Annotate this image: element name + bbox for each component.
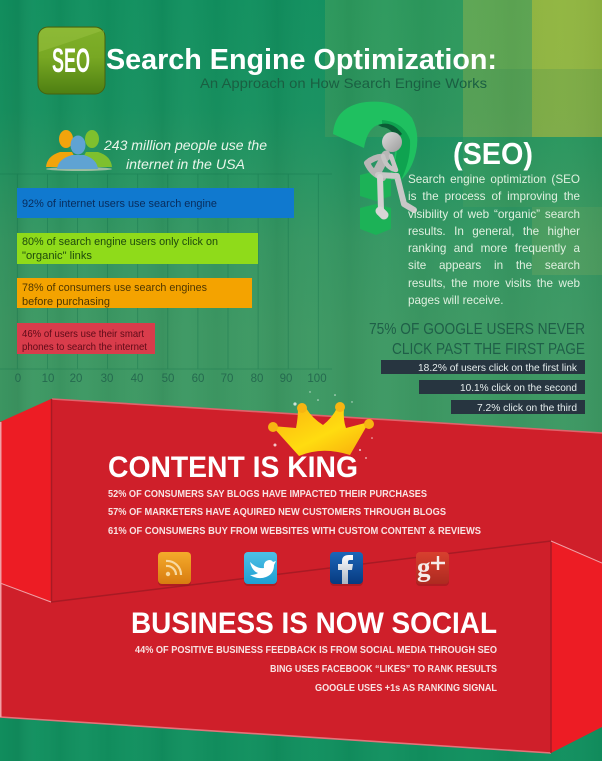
thinking figure	[367, 132, 414, 215]
bar: 78%: 78% of consumers use search engines	[22, 282, 207, 294]
title: Search Engine Optimization:	[106, 44, 497, 76]
text block: social stats: 44% OF POSITIVE BUSINESS FEEDBACK IS FROM SOCIAL MEDIA THROUGH SEO	[135, 644, 497, 656]
bar: 80%	[17, 233, 258, 264]
stat: 243 million people	[103, 137, 267, 172]
bar: first link: 18.2% of users click on the first link	[418, 362, 578, 374]
text block: SEO definition: results. In general, the higher	[408, 225, 580, 238]
red ribbon panel	[0, 399, 602, 753]
click-through bars	[381, 360, 585, 414]
question mark	[333, 102, 417, 235]
bar: 92%: 92% of internet users use search engine	[22, 198, 217, 210]
stat: 243 million people: internet in the USA	[126, 156, 245, 172]
bar: 46%: phones to search the internet	[22, 341, 147, 353]
bar: first link	[381, 360, 585, 374]
bar: third	[451, 400, 585, 414]
bar chart	[0, 174, 332, 385]
axis labels: 20	[70, 373, 82, 385]
icon: Twitter	[244, 552, 277, 586]
axis labels: 0	[15, 373, 21, 385]
text block: SEO definition: site appears in the search	[408, 259, 580, 272]
text block: SEO definition: is the process of improving the	[408, 190, 580, 203]
heading: (SEO): (SEO)	[453, 136, 533, 171]
heading: 75% of Google users	[369, 321, 585, 358]
text block: SEO definition: pages will receive.	[408, 294, 504, 307]
axis labels: 30	[101, 373, 113, 385]
axis labels: 70	[221, 373, 233, 385]
axis labels: 80	[251, 373, 263, 385]
bar: second: 10.1% click on the second	[460, 382, 577, 394]
axis labels	[15, 373, 327, 385]
bar: 80%: "organic" links	[22, 250, 93, 262]
axis labels: 90	[280, 373, 292, 385]
text block: SEO definition: results, the more visits the web	[408, 277, 580, 290]
text block: SEO definition: ranking and more frequently a	[408, 242, 580, 255]
text block: SEO definition: visibility of web “organic” search	[408, 208, 580, 221]
icon: RSS	[158, 552, 191, 586]
text block: SEO definition: Search engine optimiztion (SEO	[408, 173, 580, 186]
text block: content stats: 57% OF MARKETERS HAVE AQUIRED NEW CUSTOMERS THROUGH BLOGS	[108, 506, 446, 518]
bar: 46%: 46% of users use their smart	[22, 328, 144, 340]
bar: 46%	[17, 323, 155, 354]
stat: 243 million people: 243 million people use the	[103, 137, 267, 153]
text block: social stats	[135, 644, 497, 694]
icon: question mark with thinking figure	[333, 102, 417, 235]
axis labels: 40	[131, 373, 143, 385]
text block: content stats: 52% OF CONSUMERS SAY BLOGS HAVE IMPACTED THEIR PURCHASES	[108, 488, 427, 500]
text block: SEO definition	[408, 171, 580, 311]
heading: content is king: CONTENT IS KING	[108, 451, 358, 484]
subtitle: An Approach on How Search Engine Works	[200, 75, 487, 91]
heading: business is now social: BUSINESS IS NOW SOCIAL	[131, 607, 497, 640]
icon: crown	[268, 391, 374, 459]
text block: social stats: BING USES FACEBOOK “LIKES” TO RANK RESULTS	[270, 663, 497, 675]
text block: content stats	[108, 488, 481, 537]
axis labels: 50	[162, 373, 174, 385]
text block: social stats: GOOGLE USES +1s AS RANKING SIGNAL	[315, 682, 497, 694]
bar: 92%	[17, 188, 294, 218]
text block: content stats: 61% OF CONSUMERS BUY FROM WEBSITES WITH CUSTOM CONTENT & REVIEWS	[108, 525, 481, 537]
bar: 80%: 80% of search engine users only click on	[22, 236, 218, 248]
icon: people group	[46, 130, 112, 171]
bar: second	[419, 380, 585, 394]
logo: SEO badge	[38, 27, 105, 94]
icon: Facebook	[330, 552, 363, 586]
icon: Google Plus	[416, 552, 449, 586]
bar: 78%	[17, 278, 252, 308]
axis labels: 10	[42, 373, 54, 385]
bar: third: 7.2% click on the third	[477, 402, 577, 414]
axis labels: 100	[307, 373, 327, 385]
bar: 78%: before purchasing	[22, 296, 110, 308]
icon: Google Plus: g	[417, 552, 431, 582]
axis labels: 60	[192, 373, 204, 385]
logo: SEO badge: SEO	[52, 42, 90, 80]
